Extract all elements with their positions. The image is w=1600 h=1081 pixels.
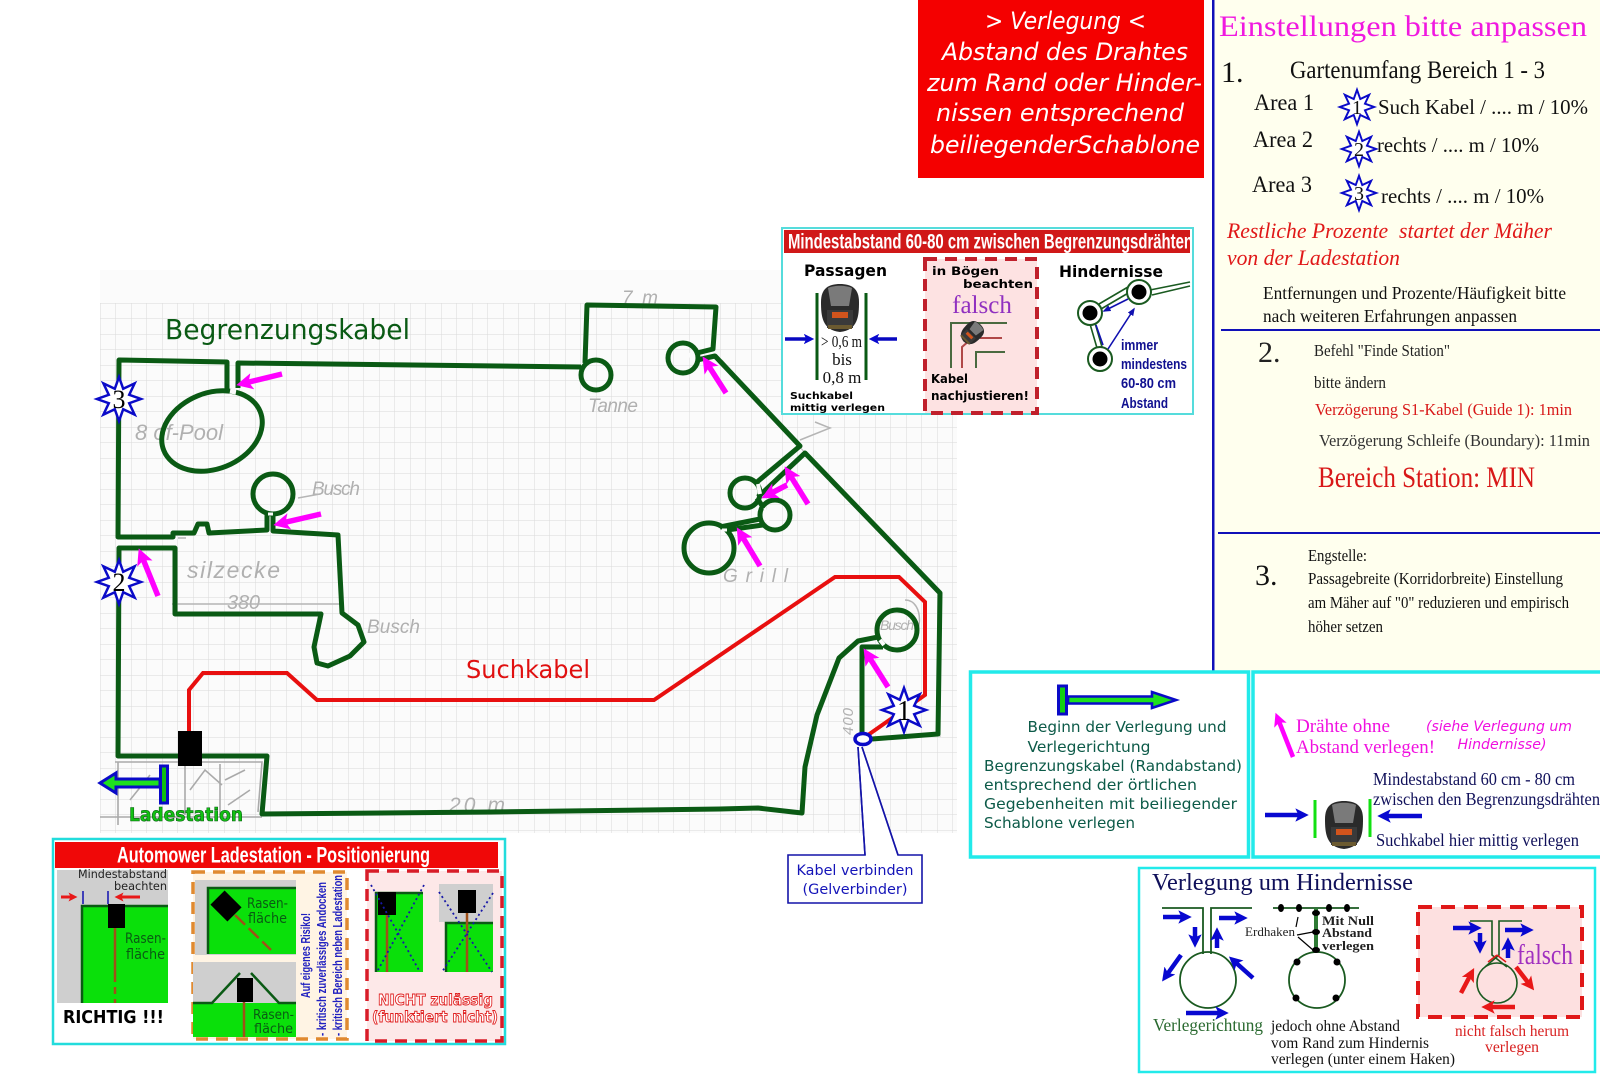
diagram: earth hooks: Mit Null [1322,913,1374,928]
section 3: narrow passage: höher setzen [1308,617,1383,636]
section 2: find station: Bereich Station: MIN [1318,461,1535,494]
panel: Einstellungen settings [1212,0,1600,671]
section 1: garden areas: Such Kabel / .... m / 10% [1378,95,1588,119]
diagram: wrong crossing [1418,907,1582,1056]
diagram: risky placement: Rasen- [247,896,288,912]
section 3: narrow passage: am Mäher auf "0" reduzieren und empirisch [1308,593,1569,612]
sub-panel: Passagen [785,261,897,414]
diagram: correct laying direction [1153,908,1263,1035]
section 2: find station [1258,336,1590,494]
Begrenzungskabel boundary wire [118,305,940,814]
label: Ladestation: Ladestation [129,804,243,826]
icon: area star 1 [882,688,926,732]
note: adjust distances: nach weiteren Erfahrungen anpassen [1263,306,1517,326]
section 2: find station: 2. [1258,336,1280,369]
section 2: find station: Verzögerung Schleife (Boundary): 11min [1319,431,1590,450]
sub-panel: Hindernisse: 60-80 cm [1121,375,1176,392]
callout: Kabel verbinden [788,747,922,903]
diagram: correct placement: RICHTIG !!! [63,1007,164,1028]
panel: Drähte ohne Abstand legend [1253,672,1600,857]
diagram: earth hooks: vom Rand zum Hindernis [1271,1035,1429,1052]
section 3: narrow passage: Engstelle: [1308,546,1367,565]
sub-panel: Passagen: 0,8 m [823,368,861,387]
gaps in wire circles [230,353,884,645]
icon: wire connector [855,734,871,744]
sub-panel: in Bögen beachten [925,259,1037,413]
sub-panel: Passagen: mittig verlegen [790,403,885,414]
section 1: garden areas: rechts / .... m / 10% [1377,133,1539,157]
legend text [984,718,1242,832]
section 1: garden areas: Area 3 [1252,172,1312,197]
section 2: find station: Verzögerung S1-Kabel (Guide 1): 1min [1315,400,1572,419]
spacing diagram with mower: Mindestabstand 60 cm - 80 cm [1373,769,1575,789]
pencil notes on the plan: 8 of-Pool [135,420,224,445]
section 1: garden areas: 1 [1352,97,1362,119]
sub-panel: Passagen: > 0,6 m [821,332,862,351]
sub-panel: Passagen: bis [832,350,852,369]
sub-panel: Hindernisse: Hindernisse [1059,262,1163,281]
section 1: garden areas: Area 1 [1254,90,1314,115]
sub-panel: Hindernisse: immer [1121,337,1158,354]
diagram: wrong crossing: falsch [1517,939,1573,971]
panel: red title Verlegung: zum Rand oder Hinder- [926,69,1202,97]
diagram: earth hooks: verlegen (unter einem Haken) [1271,1051,1455,1068]
section 1: garden areas: 3 [1354,183,1364,205]
section 1: garden areas: 2 [1354,139,1364,161]
sub-panel: in Bögen beachten: falsch [952,292,1012,319]
diagram: not allowed placement [367,871,502,1041]
section 1: garden areas: rechts / .... m / 10% [1381,184,1544,208]
icon: start direction arrow [100,766,168,803]
diagram: risky placement [193,872,347,1039]
sub-panel: in Bögen beachten: in Bögen [932,264,999,278]
pencil notes on the plan: Busch [367,617,420,638]
note: remaining percent: Restliche Prozente startet der Mäher [1226,218,1552,243]
note: adjust distances [1263,283,1566,326]
legend text: entsprechend der örtlichen [984,776,1197,794]
legend text: Beginn der Verlegung und [1028,718,1226,736]
diagram: risky placement: fläche [248,911,287,927]
icon: area star 1: 1 [897,696,911,727]
panel: red title Verlegung: Abstand des Drahtes [940,38,1188,66]
heading: Verlegung um Hindernisse [1152,870,1413,896]
panel: Beginn der Verlegung legend [970,672,1248,857]
diagram: wrong crossing: nicht falsch herum [1455,1023,1570,1040]
callout: Kabel verbinden: (Gelverbinder) [802,882,908,898]
sub-panel: Passagen: Suchkabel [790,391,853,402]
section 2: find station: bitte ändern [1314,373,1386,392]
legend text: Schablone verlegen [984,814,1135,832]
icon: area star 3: 3 [112,385,126,414]
heading: Suchkabel: Suchkabel [466,655,590,684]
sub-panel: in Bögen beachten: beachten [963,277,1033,291]
pencil notes on the plan: Busch [880,617,914,633]
note: remaining percent [1226,218,1552,270]
diagram: correct placement [57,867,168,1028]
note: remaining percent: von der Ladestation [1227,245,1400,270]
magenta arrow legend: (siehe Verlegung um [1426,719,1572,735]
diagram: correct placement: Mindestabstand [78,867,167,881]
magenta arrow legend: Abstand verlegen! [1296,737,1435,758]
section 3: narrow passage: 3. [1255,559,1278,592]
legend text: Verlegerichtung [1028,738,1150,756]
pencil notes on the plan: silzecke [187,557,280,583]
section 1: garden areas: 1. [1221,56,1244,89]
sub-panel: Hindernisse: Abstand [1121,395,1168,412]
diagram: correct laying direction: Verlegerichtung [1153,1015,1263,1035]
icon: green start arrow [1058,686,1176,714]
section 1: garden areas: Area 2 [1253,127,1313,152]
diagram: risky placement: Rasen- [253,1008,294,1023]
sub-panel: Hindernisse: mindestens [1121,356,1187,373]
icon: area star 3 [97,377,141,421]
pencil notes on the plan: Grill [723,566,789,587]
section 2: find station: Befehl "Finde Station" [1314,341,1450,360]
pencil notes on the plan: 20 m [448,794,505,817]
panel: Mindestabstand 60-80 cm [782,228,1193,414]
diagram: wrong crossing: verlegen [1485,1039,1539,1056]
diagram: risky placement: - kritisch Bereich neben Ladestation [330,875,345,1036]
diagram: correct placement: beachten [114,879,167,893]
diagram: earth hooks: verlegen [1322,938,1375,953]
note: adjust distances: Entfernungen und Prozente/Häufigkeit bitte [1263,283,1566,303]
diagram: risky placement: Auf eigenes Risiko! [298,913,313,998]
sub-panel: Passagen: Passagen [804,261,887,280]
icon: charging station [178,731,202,766]
panel: red title Verlegung: > Verlegung < [985,7,1146,35]
icon: area star 2: 2 [112,568,126,597]
diagram: risky placement: - kritisch zuverlässiges Andocken [314,882,329,1036]
section 3: narrow passage: Passagebreite (Korridorbreite) Einstellung [1308,569,1563,588]
section 1: garden areas [1221,56,1588,210]
spacing diagram with mower [1265,769,1600,850]
magenta arrow legend: Hindernisse) [1458,737,1546,753]
legend text: Gegebenheiten mit beiliegender [984,795,1238,813]
diagram: earth hooks: Abstand [1322,925,1373,940]
diagram: earth hooks [1245,904,1455,1068]
diagram: correct placement: Rasen- [125,931,166,947]
icon: area star 2 [97,560,141,604]
diagram: earth hooks: jedoch ohne Abstand [1270,1018,1400,1035]
magenta arrows: wires without gap [142,363,888,687]
panel: red title Verlegung [918,0,1204,178]
pencil notes on the plan: Tanne [588,396,638,417]
diagram: earth hooks: Erdhaken [1245,924,1295,939]
Suchkabel guide wire [189,577,925,735]
legend text: Begrenzungskabel (Randabstand) [984,757,1242,775]
sub-panel: in Bögen beachten: Kabel [931,371,968,386]
panel: Verlegung um Hindernisse [1139,868,1595,1072]
panel: Automower Ladestation Positionierung [53,839,505,1044]
red header: Automower Ladestation - Positionierung [117,842,430,868]
pencil notes on the plan: 7m [622,288,658,309]
spacing diagram with mower: Suchkabel hier mittig verlegen [1376,830,1579,850]
diagram: not allowed placement: (funktiert nicht) [372,1008,498,1026]
pencil notes on the plan: Busch [312,479,360,500]
magenta arrow legend [1278,716,1572,758]
pencil notes on the plan: 380 [227,592,260,614]
panel: red title Verlegung: nissen entsprechend [936,99,1185,127]
heading: Begrenzungskabel: Begrenzungskabel [165,313,410,346]
panel: red title Verlegung: beiliegenderSchablone [930,131,1200,159]
callout: Kabel verbinden: Kabel verbinden [796,863,914,879]
panel: graph paper garden plan [97,270,957,833]
diagram: correct placement: fläche [126,947,165,963]
pencil notes on the plan [100,288,940,825]
sub-panel: in Bögen beachten: nachjustieren! [931,388,1029,403]
pencil notes on the plan: 400 [840,707,857,735]
section 1: garden areas: Gartenumfang Bereich 1 - 3 [1290,57,1545,84]
sub-panel: Hindernisse [1059,262,1190,412]
magenta arrow legend: Drähte ohne [1296,716,1390,737]
diagram: not allowed placement: NICHT zulässig [378,991,493,1009]
section 3: narrow passage [1255,546,1569,636]
diagram: risky placement: fläche [254,1022,293,1037]
heading: Einstellungen bitte anpassen: Einstellungen bitte anpassen [1219,10,1587,43]
